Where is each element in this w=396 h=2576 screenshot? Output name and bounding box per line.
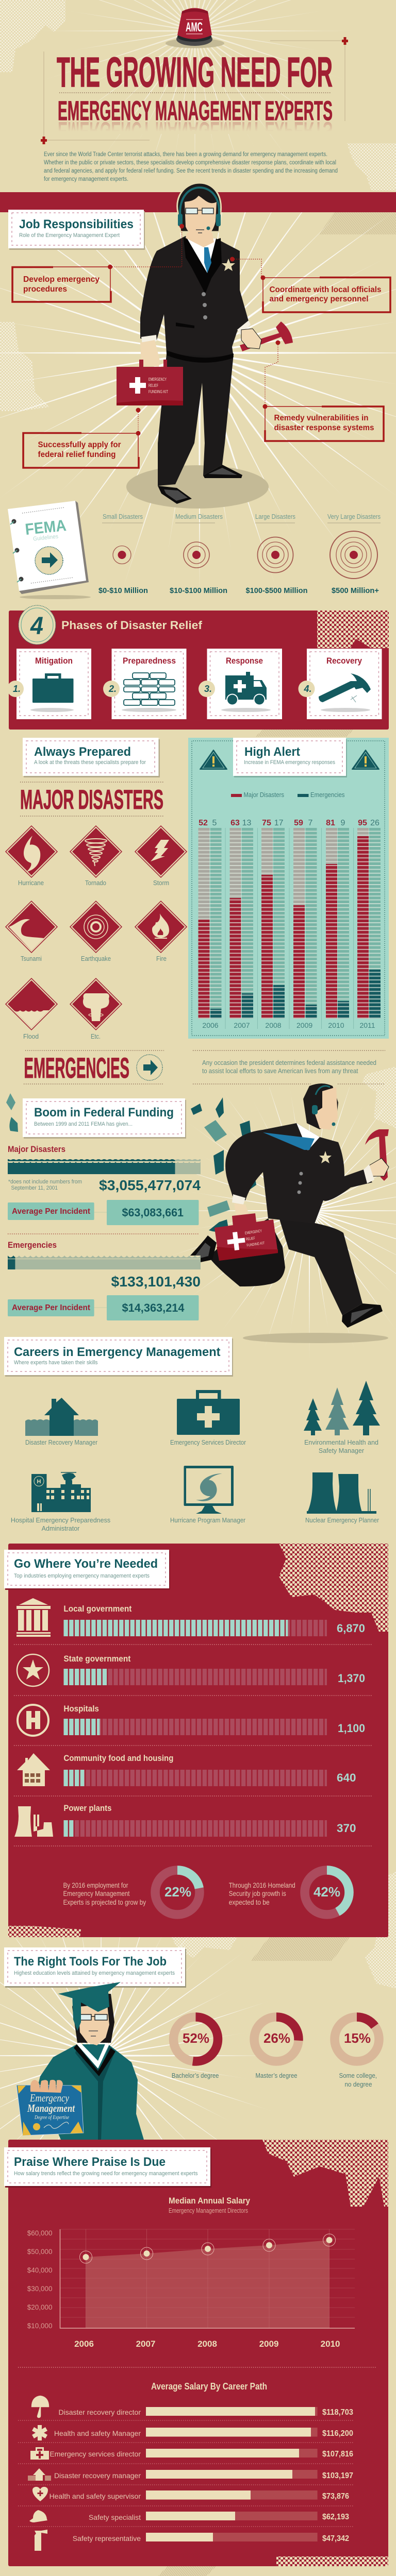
row: local government: Local government [63,1604,132,1614]
area chart: median annual salary: $20,000 [27,2303,53,2311]
row: power plants [14,1803,356,1837]
callout: coordinate with officials: Coordinate with local officials [269,285,382,294]
bar: safety representative: $47,342 [322,2534,349,2543]
bar: health and safety supervisor: Health and safety supervisor [50,2492,141,2500]
bar: emergency services director [30,2447,353,2460]
card: high alert: Increase in FEMA emergency responses [244,759,335,766]
stat: bachelor's degree: 52% [183,2030,209,2046]
chart legend [231,791,345,799]
funding: major disasters: Average Per Incident [12,1207,91,1216]
panel: praise where praise is due [4,2140,388,2566]
icon: FEMA guidelines book: FEMA [24,516,67,538]
bar: emergency services director: Emergency services director [50,2450,141,2458]
card: the right tools for the job [4,1947,186,1988]
bar: safety specialist: Safety specialist [89,2513,141,2521]
funding: emergencies: Emergencies [8,1240,57,1250]
area chart: median annual salary: 2007 [136,2339,155,2349]
hazard: fire: Fire [156,955,167,962]
panel: high alert chart [188,738,389,1039]
chart heading: Median Annual Salary [169,2196,250,2206]
chart values: 9 [341,819,345,827]
chart heading: average salary: Average Salary By Career Path [151,2381,267,2392]
stat: 22 percent growth: By 2016 employment for [63,1881,128,1889]
career: environmental health and safety manager: Safety Manager [319,1447,364,1454]
icon: corner cross top right [342,37,348,45]
scale: disaster size classes: Small Disasters [103,513,143,520]
callout: develop emergency procedures: Develop emergency [23,275,100,284]
bar: disaster recovery manager: Disaster recovery manager [54,2471,141,2480]
icon: corner cross bottom left [41,137,47,144]
area chart: median annual salary: $50,000 [27,2248,53,2256]
intro text: and federal agencies, and apply for federal relief funding. See the recent trends in disaster spending and the increasing demand [44,168,338,174]
row: community food and housing [17,1753,356,1786]
chart values: 52 [199,819,208,827]
stat: bachelor's degree [172,2017,219,2079]
bar: emergency services director: $107,816 [322,2450,353,2459]
chart year axis: 2009 [296,1021,312,1029]
funding: emergencies [8,1240,201,1320]
area chart: median annual salary: $30,000 [27,2285,53,2293]
bar: health and safety manager: Health and safety Manager [54,2429,141,2437]
callout: coordinate with officials: and emergency personnel [269,295,368,303]
intro text: for emergency management experts. [44,176,128,182]
chart values [199,819,380,827]
intro text: Whether in the public or private sectors, these specialists develop comprehensive disaster response plans, coordinate with local [44,160,336,166]
scale: disaster size classes: $0-$10 Million [98,586,148,595]
callout: coordinate with officials [230,257,390,312]
hazard: hurricane: Hurricane [18,879,44,887]
bar: health and safety supervisor: $73,876 [322,2492,349,2501]
illustration: running emergency manager: RELIEF [245,1235,255,1242]
career: disaster recovery manager: Disaster Recovery Manager [25,1439,97,1446]
chart heading [169,2196,250,2214]
card: job responsibilities [8,210,145,250]
illustration: standing emergency manager: EMERGENCY [148,377,167,382]
card: high alert: High Alert [244,745,300,759]
row: state government [17,1654,365,1686]
stat: 42 percent growth: 42% [314,1884,340,1900]
area chart: median annual salary: 2006 [74,2339,94,2349]
intro text: Ever since the World Trade Center terrorist attacks, there has been a growing demand for emergency management experts. [44,151,327,158]
funding: major disasters: $63,083,661 [122,1206,184,1219]
icon: warning triangle left [200,750,227,769]
stat: 42 percent growth: Through 2016 Homeland [229,1881,295,1889]
row: state government: State government [63,1654,131,1664]
stat: some college: no degree [344,2080,372,2088]
chart values: 95 [358,819,367,827]
career: hospital emergency preparedness administrator [11,1472,110,1532]
chart year axis: 2006 [202,1021,219,1029]
chart values: 5 [212,819,217,827]
bar: safety representative: Safety representative [73,2534,141,2543]
career: environmental health and safety manager: Environmental Health and [304,1439,378,1446]
bar: health and safety manager [32,2425,353,2441]
illustration: standing emergency manager: FUNDING KIT [148,389,168,394]
bar: disaster recovery director: Disaster recovery director [59,2408,141,2416]
card: go where you're needed: Go Where You’re Needed [14,1557,158,1571]
text: EMERGENCIES [24,1052,129,1084]
bar: disaster recovery manager [28,2468,353,2481]
career: disaster recovery manager [25,1398,98,1446]
chart values: 63 [230,819,240,827]
icon: red AMC alarm lamp [166,8,224,48]
callout: develop emergency procedures [12,224,184,302]
illustration: running emergency manager: FUNDING KIT [246,1241,265,1248]
chart year axis: 2011 [359,1021,375,1029]
card: recovery: 4. [303,684,312,694]
card: careers in emergency management: Careers in Emergency Management [14,1345,221,1359]
card: praise where praise is due: Praise Where Praise Is Due [14,2155,166,2169]
row: hospitals: 1,100 [338,1722,365,1735]
bar: safety specialist [29,2510,349,2522]
bar: safety representative [35,2530,349,2551]
panel: 4 phases of disaster relief [7,605,389,730]
row: hospitals [18,1704,365,1736]
area chart: median annual salary: $40,000 [27,2266,53,2274]
career: hurricane program manager: Hurricane Program Manager [170,1517,245,1524]
card: job responsibilities: Job Responsibilities [19,217,134,231]
intro text [44,151,338,182]
stat: 42 percent growth: Security job growth is [229,1889,286,1897]
career: hurricane program manager [170,1466,245,1524]
card: mitigation [7,649,91,719]
card: careers in emergency management [4,1337,233,1377]
hazard: tornado [70,826,122,887]
row: community food and housing: Community food and housing [63,1753,173,1763]
card: boom in federal funding: Between 1999 and 2011 FEMA has given... [34,1121,133,1127]
funding: major disasters: *does not include numbers from [8,1179,82,1185]
badge: number 4 [19,605,56,645]
area chart: median annual salary: 2008 [197,2339,217,2349]
icon: warning triangle right [352,750,379,769]
row: power plants: Power plants [63,1803,111,1813]
card: the right tools for the job: The Right Tools For The Job [14,1955,167,1969]
title [57,49,333,126]
funding: emergencies: $133,101,430 [111,1274,201,1290]
hazard: flood [6,978,57,1040]
hazard: etc mushroom cloud: Etc. [91,1033,101,1040]
row: hospitals: Hospitals [63,1704,99,1714]
hazard: earthquake [70,901,122,962]
scale: disaster size classes: $100-$500 Million [245,586,307,595]
row: local government [16,1598,365,1637]
funding: major disasters: $3,055,477,074 [99,1177,201,1193]
bar: health and safety manager: $116,200 [322,2429,353,2438]
stat: 42 percent growth [229,1870,349,1914]
bar: disaster recovery director [31,2396,353,2418]
illustration: graduate with diploma: Management [27,2102,75,2114]
illustration: standing emergency manager: RELIEF [148,383,158,388]
scale: disaster size classes: Medium Disasters [175,513,223,520]
heading: major disasters: MAJOR DISASTERS [20,785,163,815]
card: response [199,649,282,719]
illustration: running emergency manager [184,1083,389,1343]
callout: remedy vulnerabilities: Remedy vulnerabilities in [274,414,368,422]
stat: master's degree [254,2017,299,2079]
career: hospital emergency preparedness administrator: Administrator [42,1525,79,1532]
card: mitigation: 1. [13,684,21,694]
scale: disaster size classes [98,513,381,595]
bar: health and safety supervisor [32,2487,349,2501]
stat: 22 percent growth: Emergency Management [63,1889,130,1897]
text: emergency definition [202,1059,376,1075]
card: praise where praise is due: How salary trends reflect the growing need for emergency management experts [14,2171,198,2177]
icon: FEMA guidelines book [8,501,91,599]
chart values: 7 [308,819,313,827]
row: community food and housing: 640 [337,1771,356,1784]
text: emergency definition: to assist local efforts to save American lives from any threat [202,1067,358,1075]
row: state government: 1,370 [338,1672,365,1685]
funding: emergencies: Average Per Incident [12,1303,91,1312]
panel: 4 phases of disaster relief: Phases of Disaster Relief [61,619,203,632]
callout: develop emergency procedures: procedures [23,285,67,294]
icon: red AMC alarm lamp: AMC [186,20,203,35]
card: praise where praise is due [4,2147,211,2188]
bar: safety specialist: $62,193 [322,2513,349,2521]
hazard: etc mushroom cloud [70,978,122,1040]
illustration: running emergency manager: EMERGENCY [244,1228,262,1235]
chart year axis: 2008 [265,1021,282,1029]
area chart: median annual salary: 2010 [321,2339,340,2349]
funding: major disasters [8,1144,201,1225]
callout: apply for federal relief [23,408,140,468]
stat: bachelor's degree: Bachelor’s degree [172,2072,219,2079]
hazard: storm [135,826,187,887]
career: nuclear emergency planner [305,1472,379,1524]
hazard: earthquake: Earthquake [81,955,111,962]
callout: apply for federal relief: federal relief funding [38,450,116,459]
callout: apply for federal relief: Successfully apply for [38,440,121,449]
card: always prepared: Always Prepared [34,745,131,759]
hazard: hurricane [6,826,57,887]
stat: some college: Some college, [339,2072,377,2079]
bar: disaster recovery manager: $103,197 [322,2471,353,2480]
chart year axis: 2007 [234,1021,250,1029]
chart values: 13 [242,819,252,827]
card: mitigation: Mitigation [35,656,73,666]
illustration: graduate with diploma [16,1982,144,2140]
callout: remedy vulnerabilities [263,340,384,441]
area chart: median annual salary: $10,000 [27,2322,53,2330]
stat: 22 percent growth: 22% [164,1884,191,1900]
illustration: graduate with diploma: Emergency [29,2092,70,2104]
row: power plants: 370 [337,1822,356,1835]
funding: major disasters: Major Disasters [8,1144,65,1154]
stat: some college [335,2017,379,2088]
chart values: 75 [262,819,271,827]
career: hospital emergency preparedness administrator: H [37,1479,41,1485]
hazard: fire [135,901,187,962]
career: nuclear emergency planner: Nuclear Emergency Planner [305,1517,379,1524]
card: go where you're needed: Top industries employing emergency management experts [14,1573,150,1579]
illustration: graduate with diploma: Degree of Expertise [34,2115,69,2121]
bar: disaster recovery director: $118,703 [322,2408,353,2417]
stat: 22 percent growth: Experts is projected to grow by [63,1898,146,1906]
chart values: 17 [274,819,284,827]
scale: disaster size classes: Large Disasters [255,513,295,520]
career: environmental health and safety manager [304,1381,380,1454]
stat: master's degree: Master’s degree [256,2072,297,2079]
card: response: Response [226,656,263,666]
hazard: storm: Storm [153,879,169,887]
card: go where you're needed [4,1550,170,1590]
chart year axis [202,1021,375,1029]
badge: number 4: 4 [30,613,43,640]
scale: disaster size classes: $10-$100 Million [170,586,227,595]
career: emergency services director: Emergency Services Director [170,1439,246,1446]
chart values: 26 [370,819,380,827]
chart heading: Emergency Management Directors [169,2207,248,2214]
scale: disaster size classes: Very Large Disasters [327,513,381,520]
panel: go where you're needed [4,1544,388,1937]
chart values: 59 [294,819,303,827]
callout: remedy vulnerabilities: disaster response systems [274,423,374,432]
card: the right tools for the job: Highest education levels attained by emergency management experts [14,1970,175,1976]
funding: emergencies: $14,363,214 [122,1301,185,1314]
row: local government: 6,870 [337,1622,365,1635]
area chart: median annual salary: $60,000 [27,2229,53,2237]
card: response: 3. [204,684,212,694]
scale: disaster size classes: $500 Million+ [332,586,379,595]
illustration: standing emergency manager [117,183,293,509]
card: careers in emergency management: Where experts have taken their skills [14,1360,98,1366]
stat: 42 percent growth: expected to be [229,1898,270,1906]
hazard: flood: Flood [23,1033,39,1040]
card: boom in federal funding [23,1098,186,1139]
text: emergency definition: Any occasion the president determines federal assistance needed [202,1059,376,1066]
card: preparedness: 2. [108,684,117,694]
card: preparedness [103,649,187,719]
card: job responsibilities: Role of the Emergency Management Expert [19,232,120,239]
hazard: tornado: Tornado [85,879,106,887]
card: always prepared: A look at the threats these specialists prepare for [34,759,146,766]
stat: some college: 15% [344,2030,371,2046]
hazard: tsunami: Tsunami [21,955,42,962]
icon: FEMA guidelines book: Guidelines [33,533,59,542]
card: high alert [233,738,347,777]
career: hospital emergency preparedness administrator: Hospital Emergency Preparedness [11,1517,110,1524]
stat: master's degree: 26% [263,2030,290,2046]
area chart: median annual salary: 2009 [259,2339,278,2349]
chart legend: Emergencies [310,791,345,799]
stat: 22 percent growth [63,1870,200,1914]
card: boom in federal funding: Boom in Federal Funding [34,1106,174,1120]
chart year axis: 2010 [328,1021,344,1029]
hazard: tsunami [6,901,57,962]
card: recovery: Recovery [326,656,362,666]
area chart: median annual salary [27,2229,355,2349]
bar chart: FEMA responses [198,828,381,1019]
card: preparedness: Preparedness [123,656,176,666]
chart values: 81 [326,819,335,827]
funding: major disasters: September 11, 2001 [11,1185,58,1191]
card: recovery [298,649,382,719]
chart legend: Major Disasters [243,791,284,799]
career: emergency services director [170,1390,246,1446]
icon: arrow circle [137,1055,162,1080]
card: always prepared [23,738,160,777]
